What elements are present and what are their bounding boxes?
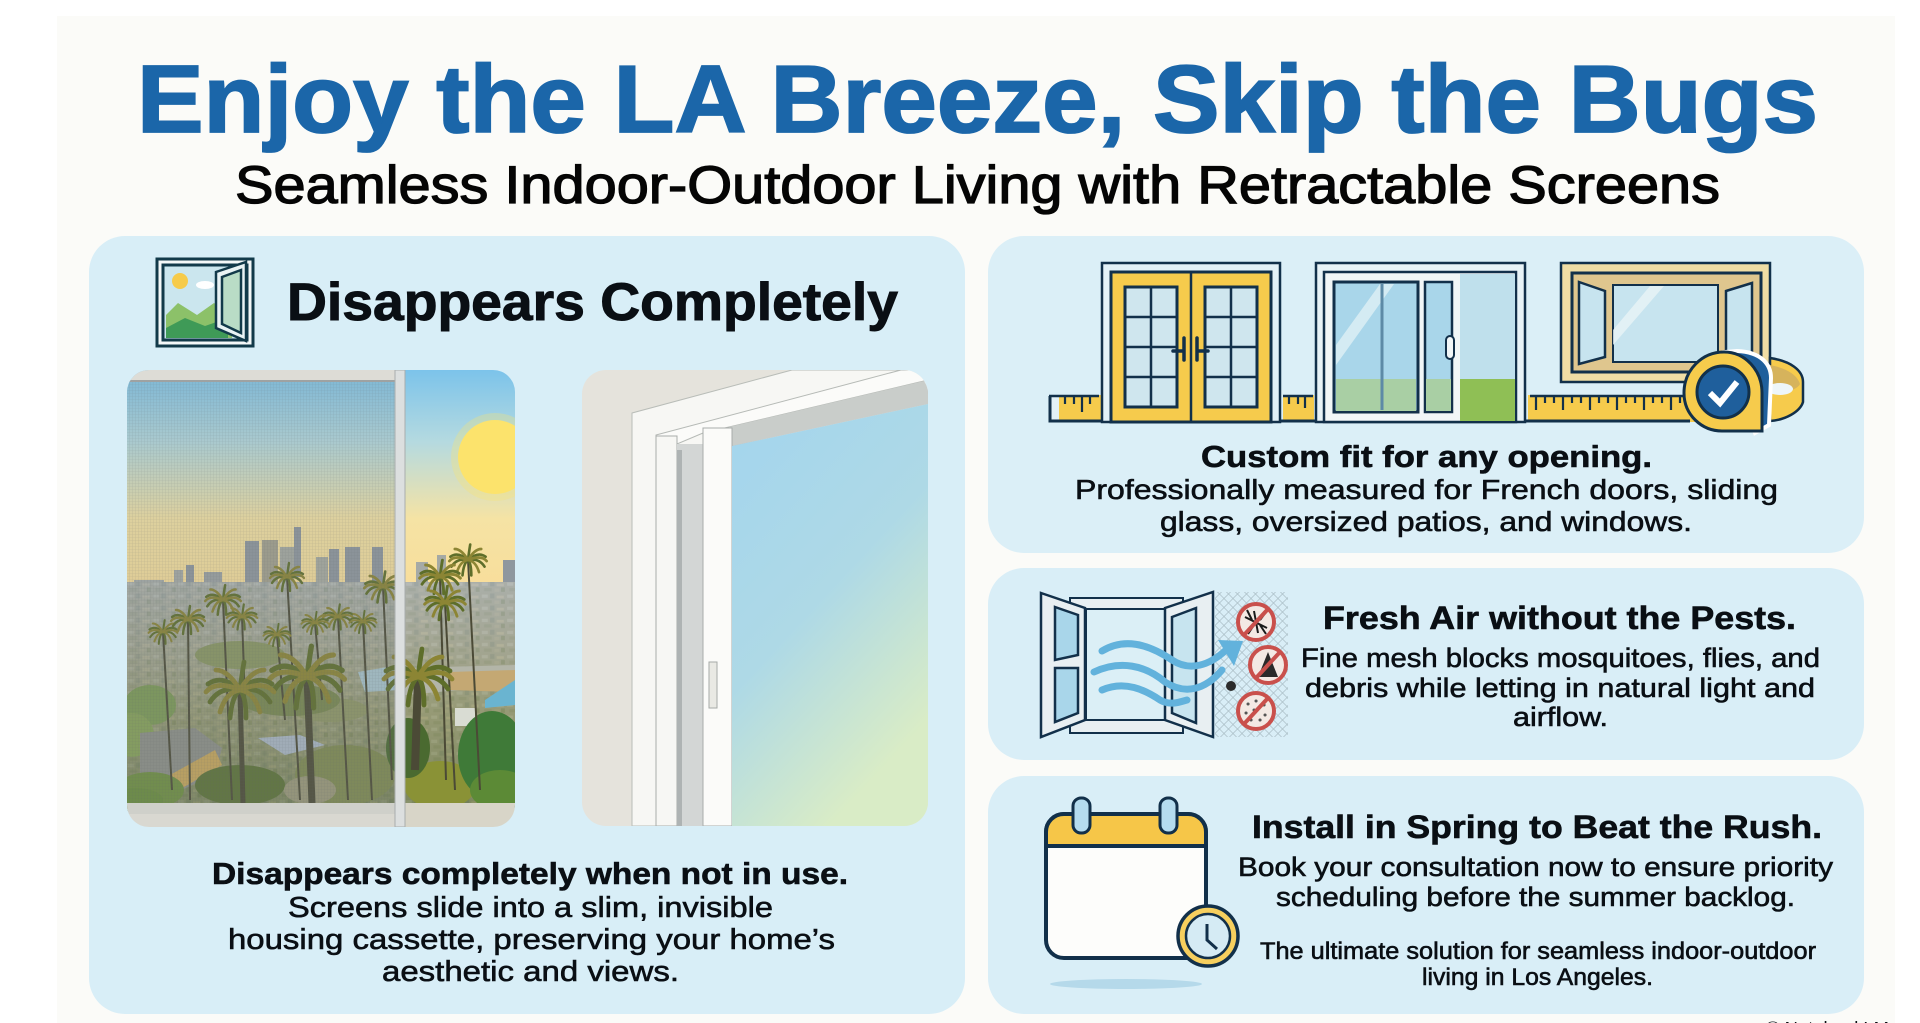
text: install in spring to beat the rush: Book your consultation now to ensure priority [1238, 852, 1834, 882]
icon: bay window [1561, 263, 1770, 382]
text: custom fit for any opening [1075, 439, 1778, 537]
icon: sliding glass door [1316, 263, 1525, 422]
text: disappears when not in use: Disappears completely when not in use. [212, 856, 848, 891]
text: disappears when not in use: housing cassette, preserving your home’s [228, 924, 835, 956]
text: install in spring to beat the rush [1238, 809, 1834, 991]
text: custom fit for any opening: Custom fit for any opening. [1201, 439, 1652, 474]
sun [451, 413, 515, 501]
blocked debris [1238, 693, 1274, 729]
measuring tape band [1049, 395, 1698, 422]
city sprawl [127, 582, 515, 804]
trees and rooftops [107, 641, 530, 812]
panel: custom fit [988, 236, 1864, 553]
icon: french doors [1102, 263, 1280, 422]
text: custom fit for any opening: Professionally measured for French doors, sliding [1075, 474, 1778, 505]
panel: fresh air without the pests [988, 568, 1864, 760]
text: disappears when not in use: aesthetic and views. [382, 956, 679, 988]
airflow arrows [1094, 644, 1226, 703]
text: fresh air without the pests: Fine mesh blocks mosquitoes, flies, and [1301, 643, 1820, 673]
icon: calendar with clock [1046, 798, 1238, 989]
text: fresh air without the pests: debris while letting in natural light and [1305, 673, 1815, 703]
illustration: slim housing cassette [582, 370, 928, 826]
screen frame [127, 370, 515, 827]
panel: install in spring [988, 776, 1864, 1014]
blocked mosquito [1238, 604, 1274, 640]
text: fresh air without the pests: Fresh Air without the Pests. [1323, 600, 1796, 636]
text: fresh air without the pests: airflow. [1513, 702, 1608, 732]
title: Enjoy the LA Breeze, Skip the Bugs [137, 46, 1818, 153]
icon: tape measure with check [1684, 351, 1803, 433]
text: custom fit for any opening: glass, oversized patios, and windows. [1160, 506, 1692, 537]
text: install in spring to beat the rush: Install in Spring to Beat the Rush. [1252, 809, 1822, 845]
text: disappears when not in use [212, 856, 848, 988]
palm trees [163, 560, 480, 803]
panel: disappears completely [89, 236, 965, 1014]
text: install in spring to beat the rush: scheduling before the summer backlog. [1276, 882, 1795, 912]
heading: disappears completely: Disappears Completely [287, 273, 899, 332]
icon: open window with airflow and blocked pests [1041, 592, 1288, 737]
screen mesh overlay [127, 381, 395, 803]
text: install in spring to beat the rush: The ultimate solution for seamless indoor-outdoor [1260, 938, 1816, 965]
text: disappears when not in use: Screens slide into a slim, invisible [288, 892, 773, 924]
photo: LA skyline through screen [127, 370, 515, 827]
text: fresh air without the pests [1301, 600, 1820, 732]
icon: open window [157, 259, 253, 346]
blocked fly [1250, 647, 1286, 683]
stray insect [1226, 681, 1236, 691]
downtown skyline [134, 527, 515, 582]
text: install in spring to beat the rush: living in Los Angeles. [1422, 964, 1653, 991]
subtitle: Seamless Indoor-Outdoor Living with Retractable Screens [235, 156, 1720, 215]
handle [709, 662, 717, 708]
